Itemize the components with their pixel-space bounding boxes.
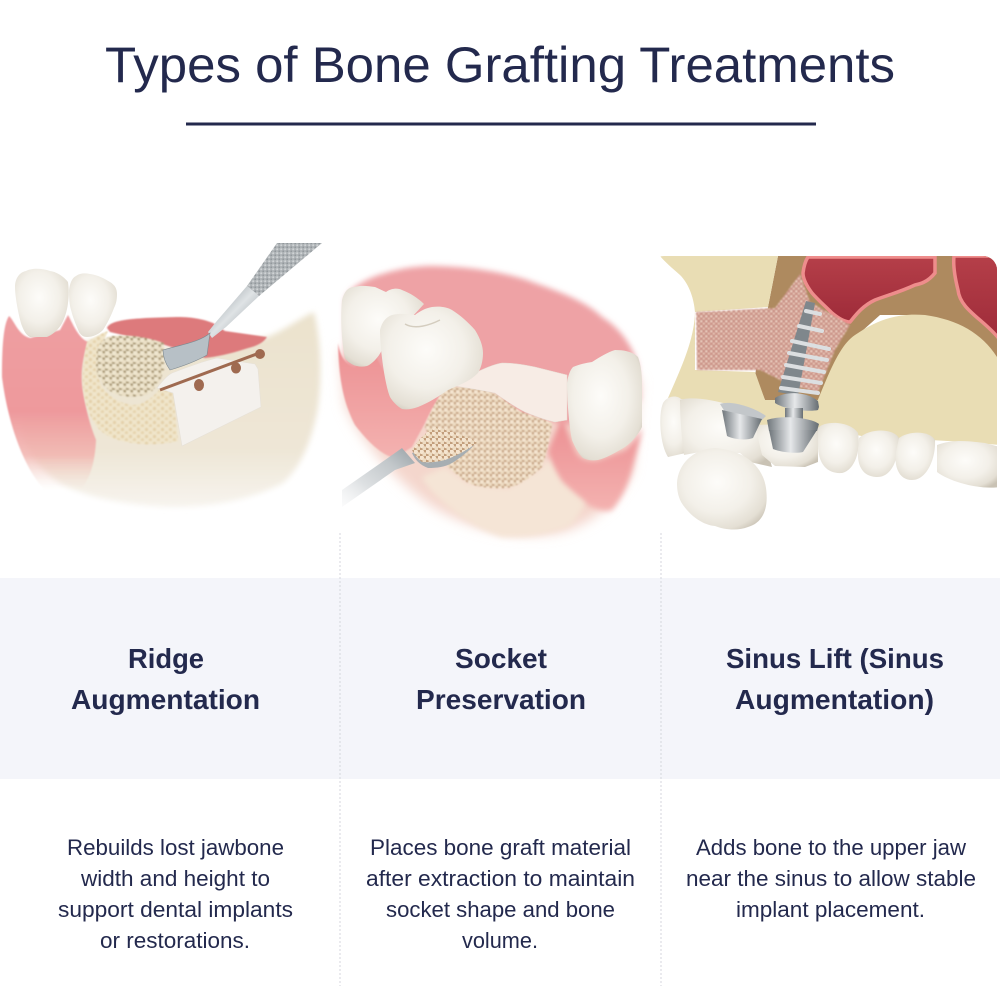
column: socket preservation text: volume. bbox=[462, 928, 538, 953]
bone scoop bbox=[342, 427, 478, 507]
column: socket preservation text: after extraction to maintain bbox=[366, 866, 635, 891]
tooth: rear molar bbox=[341, 286, 424, 367]
bone graft area bbox=[696, 274, 850, 392]
column: ridge augmentation text: support dental implants bbox=[58, 897, 293, 922]
illustration: ridge augmentation bbox=[2, 243, 322, 507]
column: sinus lift heading: Augmentation) bbox=[735, 684, 934, 715]
column: ridge augmentation text: Rebuilds lost jawbone bbox=[67, 835, 284, 860]
column: sinus lift text: near the sinus to allow stable bbox=[686, 866, 976, 891]
near gum bbox=[2, 315, 96, 490]
column: sinus lift text bbox=[686, 835, 976, 922]
column: sinus lift text: Adds bone to the upper jaw bbox=[696, 835, 966, 860]
column: socket preservation heading bbox=[416, 643, 586, 715]
rear teeth bbox=[660, 397, 1000, 488]
sinus cavity left bbox=[803, 257, 935, 322]
lower bone strip bbox=[774, 400, 818, 422]
membrane tacks bbox=[160, 349, 265, 391]
column: socket preservation text: socket shape and bone bbox=[386, 897, 615, 922]
column: socket preservation text bbox=[366, 835, 635, 953]
column: sinus lift heading bbox=[726, 643, 944, 715]
column: ridge augmentation heading: Augmentation bbox=[71, 684, 260, 715]
title: Types of Bone Grafting Treatments bbox=[105, 37, 895, 93]
membrane bbox=[448, 363, 567, 422]
membrane bbox=[157, 358, 261, 446]
column: ridge augmentation text bbox=[58, 835, 293, 953]
title underline bbox=[186, 122, 816, 126]
gum left front bbox=[338, 343, 445, 458]
implant abutment right bbox=[767, 417, 819, 453]
column: sinus lift heading: Sinus Lift (Sinus bbox=[726, 643, 944, 674]
implant screw bbox=[775, 301, 829, 421]
tooth: left molar bbox=[15, 269, 69, 337]
implant abutment left bbox=[720, 403, 766, 439]
soft peach base bbox=[340, 350, 640, 535]
exposed bone wall bbox=[83, 331, 178, 444]
gum back wall bbox=[345, 266, 640, 425]
column: socket preservation text: Places bone graft material bbox=[370, 835, 631, 860]
gum right front bbox=[548, 417, 642, 511]
bone granules bbox=[96, 335, 164, 397]
upper left bone bbox=[660, 256, 778, 312]
column: sinus lift text: implant placement. bbox=[736, 897, 925, 922]
column: ridge augmentation heading bbox=[71, 643, 260, 715]
bone base bbox=[422, 457, 585, 537]
tooth: right molar bbox=[567, 350, 642, 460]
jaw bone bbox=[22, 312, 320, 507]
instrument bbox=[163, 243, 322, 370]
lower left bone bbox=[668, 312, 766, 425]
tooth: front molar bbox=[380, 307, 483, 409]
heading band bbox=[0, 578, 1000, 779]
sinus cavity right bbox=[954, 256, 1000, 340]
far gum ridge bbox=[107, 317, 267, 358]
illustration: socket preservation bbox=[338, 266, 642, 537]
loose crown bbox=[677, 448, 767, 530]
cancellous bone bbox=[755, 256, 1000, 400]
right maxilla bone bbox=[815, 315, 1000, 445]
column: socket preservation heading: Preservation bbox=[416, 684, 586, 715]
illustration: sinus lift bbox=[660, 256, 1000, 530]
tooth: second molar bbox=[69, 273, 117, 337]
column: ridge augmentation heading: Ridge bbox=[128, 643, 204, 674]
column: ridge augmentation text: or restorations. bbox=[100, 928, 250, 953]
column: socket preservation heading: Socket bbox=[455, 643, 547, 674]
granule socket bbox=[425, 386, 552, 488]
column: ridge augmentation text: width and height to bbox=[80, 866, 270, 891]
